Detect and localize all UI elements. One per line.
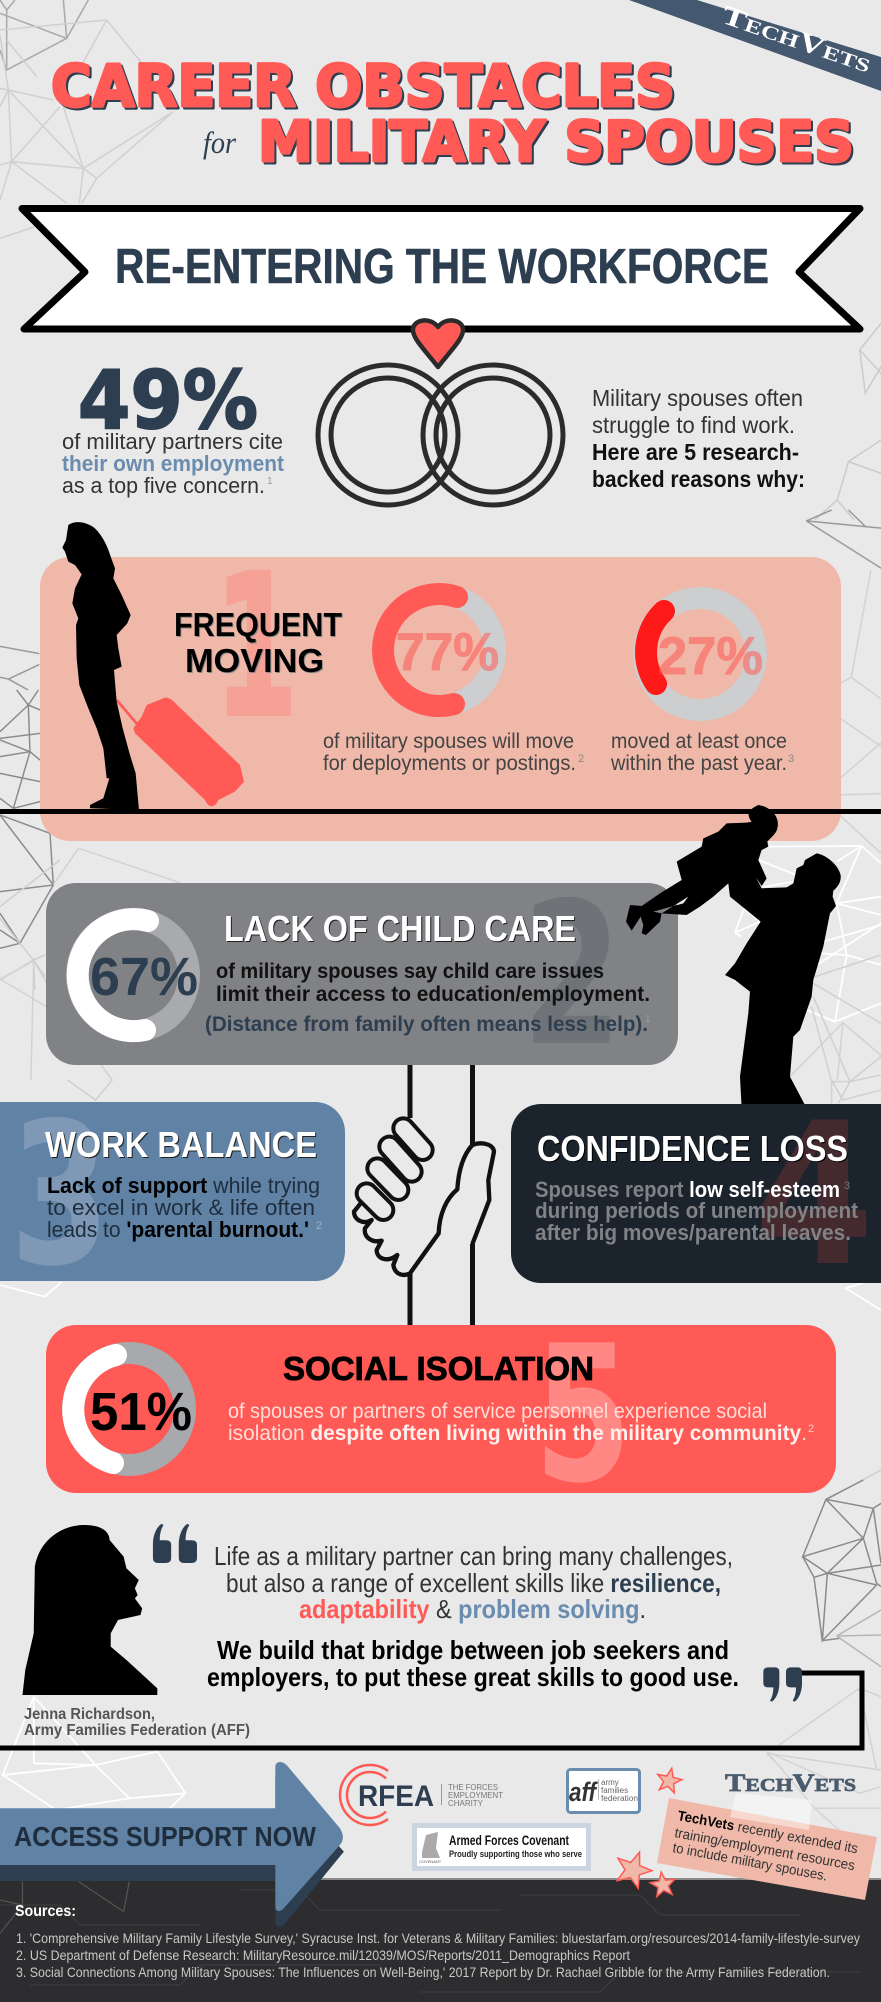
note: TechVets extended resources [657,1793,877,1900]
numeral 5: 5 [534,1305,632,1525]
quote mark: closing [763,1667,802,1702]
heading: social isolation: SOCIAL ISOLATION [283,1350,594,1387]
quote text [207,1541,739,1692]
text: child care: (Distance from family often means less help). [205,1013,648,1036]
text: deployments [323,730,584,775]
heading: work balance: WORK BALANCE [45,1124,317,1165]
logo: RFEA: EMPLOYMENT [448,1790,503,1800]
text: social isolation: of spouses or partners of service personnel experience social [228,1400,767,1423]
quote text: adaptability & problem solving. [299,1594,646,1624]
note: TechVets extended resources: TechVets recently extended its [676,1807,859,1856]
stat: 49 percent: 49% [78,354,258,447]
stat: 49 percent: 1 [267,476,273,487]
title: for [203,125,237,160]
logo: army families federation: federation [601,1794,638,1803]
heading: lack of child care: LACK OF CHILD CARE [224,908,576,949]
intro text: Military spouses often [592,385,803,411]
intro text: struggle to find work. [592,412,795,438]
ribbon: TechVets corner [629,0,881,91]
quote text: We build that bridge between job seekers and [217,1635,729,1665]
text: work balance: Lack of support while trying [47,1173,320,1198]
heading: frequent moving: FREQUENT [174,606,342,643]
logo: armed forces covenant: Armed Forces Covenant [449,1832,569,1848]
heading: frequent moving [174,606,342,679]
connector lines [410,1065,472,1326]
panel 1: frequent moving [40,533,841,841]
attribution: Jenna Richardson, [24,1706,155,1723]
icon: heart [413,320,463,367]
ground line [0,809,881,814]
logo: RFEA: THE FORCES [448,1782,498,1792]
donut: 67 percent [77,919,198,1031]
quote mark: opening [153,1524,197,1563]
intro text: backed reasons why: [592,466,805,492]
text: confidence loss: 3 [844,1180,850,1192]
text: confidence loss: after big moves/parental leaves. [535,1220,851,1245]
text: moved at least once: 3 [788,753,794,765]
stat: 49 percent: their own employment [62,451,285,476]
intro text [592,385,805,492]
donut: 27 percent [644,598,763,710]
panel 4: confidence loss [511,1081,881,1310]
stat: 49 percent: of military partners cite [62,429,283,454]
logo: army families federation: families [601,1786,628,1795]
text: deployments: of military spouses will move [323,730,574,753]
text: moved at least once: moved at least once [611,730,787,753]
quote text: but also a range of excellent skills like resilience, [226,1568,721,1598]
text: social isolation [228,1400,814,1445]
logo: RFEA: CHARITY [448,1798,483,1808]
heading: frequent moving: MOVING [185,642,324,679]
attribution: Army Families Federation (AFF) [24,1722,250,1739]
panel 3: work balance [0,1081,345,1310]
logo: armed forces covenant [414,1826,588,1868]
quote text: Life as a military partner can bring many challenges, [214,1541,733,1571]
icon: suitcase [117,698,244,806]
note: TechVets extended resources: to include military spouses. [671,1839,829,1884]
logo: TechVets: TechVets [725,1770,856,1797]
sources: Sources: [15,1903,76,1920]
icon: stars [611,1766,684,1897]
title: CAREER OBSTACLES [51,52,675,120]
logo: army families federation: army [601,1778,619,1787]
donut: 77 percent [383,594,499,706]
text: social isolation: 2 [808,1423,814,1435]
footer band [0,1878,881,2002]
text: deployments: for deployments or postings. [323,752,576,775]
stat: 49 percent: as a top five concern. [62,473,265,498]
intro text: Here are 5 research- [592,439,799,465]
text: child care [205,960,651,1036]
text: confidence loss: during periods of unemployment [535,1198,859,1223]
donut: 51 percent: 51% [90,1382,192,1442]
logo: army families federation: aff [569,1777,598,1807]
quote frame line [0,1673,862,1748]
numeral 1: 1 [214,533,298,760]
text: confidence loss: Spouses report low self-esteem [535,1177,840,1202]
donut: 67 percent: 67% [90,947,198,1007]
title: MILITARY SPOUSES [258,110,854,175]
text: child care: of military spouses say child care issues [216,960,604,983]
banner: re-entering the workforce: RE-ENTERING THE WORKFORCE [115,240,769,294]
title [51,52,854,175]
arrow: access support now: ACCESS SUPPORT NOW [14,1821,317,1852]
arrow: access support now [0,1762,344,1927]
numeral 3: 3 [10,1081,110,1310]
logo: RFEA: RFEA [358,1780,434,1813]
stat: 49 percent [62,354,285,498]
sources: 2. US Department of Defense Research: MilitaryResource.mil/12039/MOS/Reports/2011_Demographics Report [16,1947,630,1963]
silhouette: woman with suitcase [62,522,139,810]
sources [15,1903,860,1980]
text: social isolation: isolation despite often living within the military community. [228,1422,807,1445]
text: work balance: leads to 'parental burnout.' [47,1217,309,1242]
text: work balance [47,1173,322,1242]
text: confidence loss [535,1177,859,1245]
attribution [24,1706,250,1739]
panel 5: social isolation [46,1305,836,1525]
text: work balance: 2 [316,1220,322,1232]
text: moved at least once [610,730,794,775]
donut: 51 percent [73,1353,192,1465]
heading: confidence loss: CONFIDENCE LOSS [537,1128,848,1169]
logo: army families federation [568,1770,640,1812]
donut: 27 percent: 27% [658,627,763,686]
icon: linked rings [318,365,563,505]
icon: hand clasp [354,1128,494,1275]
logo: RFEA [340,1765,503,1825]
ribbon: TechVets corner: TechVets [718,0,875,78]
numeral 2: 2 [522,861,622,1090]
text: child care: 1 [645,1014,651,1025]
donut: 77 percent: 77% [396,623,499,682]
logo: armed forces covenant: COVENANT [419,1859,442,1864]
banner: re-entering the workforce [22,208,860,329]
note: TechVets extended resources: training/employment resources [673,1824,856,1873]
panel 2: lack of child care [46,861,678,1090]
logo: armed forces covenant: Proudly supporting those who serve [449,1849,582,1859]
silhouette: parent lifting child [626,805,841,1108]
quote text: employers, to put these great skills to good use. [207,1662,739,1692]
text: work balance: to excel in work & life often [47,1195,315,1220]
text: deployments: 2 [578,753,584,765]
text: moved at least once: within the past year. [610,752,787,775]
silhouette: quote speaker [22,1525,157,1695]
text: child care: limit their access to education/employment. [216,983,650,1006]
